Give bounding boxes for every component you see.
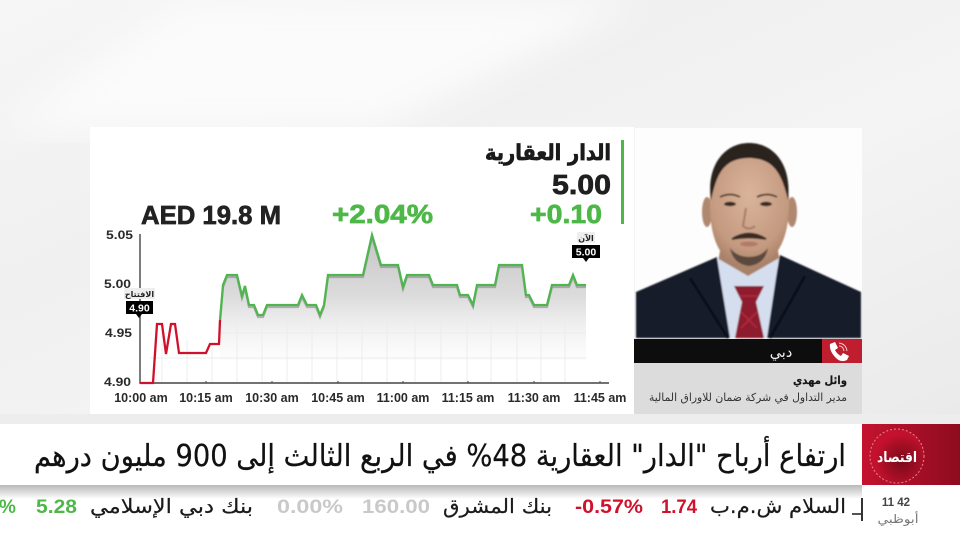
ticker change: -0.57% — [575, 497, 643, 518]
current price tag: 5.00 — [576, 246, 596, 258]
guest title: مدير التداول في شركة ضمان للاوراق المالية — [649, 391, 847, 404]
headline: ارتفاع أرباح "الدار" العقارية 48% في الربع الثالث إلى 900 مليون درهم — [34, 435, 846, 474]
logo: economy — [862, 424, 960, 485]
x axis labels: 10:45 am — [311, 391, 365, 405]
x axis labels: 10:30 am — [245, 391, 299, 405]
traded value: AED 19.8 M — [141, 200, 281, 230]
ticker divider — [861, 498, 863, 521]
hair — [710, 143, 789, 200]
percent change: +2.04% — [332, 199, 433, 229]
axis ticks — [206, 381, 600, 383]
panel: guest — [634, 128, 862, 414]
ticker name: بنك المشرق — [443, 494, 552, 518]
shirt — [717, 258, 779, 338]
y axis labels: 5.05 — [106, 228, 133, 242]
x axis labels: 10:15 am — [179, 391, 233, 405]
panel: stock chart — [90, 127, 634, 414]
ticker — [0, 485, 960, 540]
headline bar — [0, 424, 862, 485]
x axis labels: 11:45 am — [574, 391, 626, 405]
face — [710, 156, 789, 267]
ticker name: بنك دبي الإسلامي — [90, 494, 253, 519]
eyes — [724, 202, 736, 206]
y axis labels: 5.00 — [104, 277, 131, 291]
lower band background — [0, 414, 960, 424]
guest caption box — [634, 363, 862, 414]
stock name: الدار العقارية — [485, 141, 611, 166]
open price tag — [124, 288, 155, 318]
nose shade — [743, 208, 755, 228]
suit — [636, 257, 735, 338]
logo: economy: اقتصاد — [877, 450, 917, 466]
open price tag: الافتتاح — [125, 290, 154, 299]
clock city: أبوظبي — [878, 511, 918, 527]
x axis labels: 11:15 am — [442, 391, 494, 405]
moustache — [732, 234, 766, 239]
green price line — [220, 235, 586, 320]
ticker name: السلام ش.م.ب — [710, 494, 846, 518]
open price tag: 4.90 — [129, 302, 150, 314]
ticker value: 1.74 — [661, 497, 697, 518]
line shadow — [220, 237, 586, 322]
beard — [730, 248, 768, 266]
background — [0, 0, 960, 424]
chart grid and area — [150, 235, 586, 383]
current price tag — [572, 232, 600, 262]
y axis labels: 4.90 — [104, 375, 131, 389]
tie — [734, 286, 764, 338]
axes — [140, 234, 609, 383]
ticker change: 0.00% — [277, 497, 343, 518]
y axis labels: 4.95 — [105, 326, 132, 340]
guest name: وائل مهدي — [793, 374, 847, 387]
lapel shade — [690, 276, 805, 338]
ticker value: 5.28 — [36, 497, 77, 518]
accent bar — [621, 140, 624, 224]
ears — [702, 197, 712, 227]
mouth — [740, 242, 758, 246]
price change: +0.10 — [530, 199, 602, 229]
ticker clipped letter — [852, 513, 861, 515]
current price tag: الآن — [578, 233, 594, 243]
eyebrows — [720, 194, 777, 197]
location text: دبي — [770, 345, 792, 361]
clock time: 11 42 — [882, 497, 910, 509]
x axis labels: 11:30 am — [508, 391, 560, 405]
location bar — [634, 339, 823, 363]
guest portrait — [636, 143, 861, 338]
icon: phone — [822, 339, 862, 363]
y axis labels — [104, 228, 133, 389]
x axis labels: 11:00 am — [377, 391, 429, 405]
x axis labels: 10:00 am — [114, 391, 168, 405]
ticker value: 160.00 — [362, 497, 430, 518]
x axis labels — [114, 391, 626, 405]
neck — [718, 240, 780, 285]
red price line — [140, 320, 220, 383]
stock price: 5.00 — [552, 169, 611, 200]
